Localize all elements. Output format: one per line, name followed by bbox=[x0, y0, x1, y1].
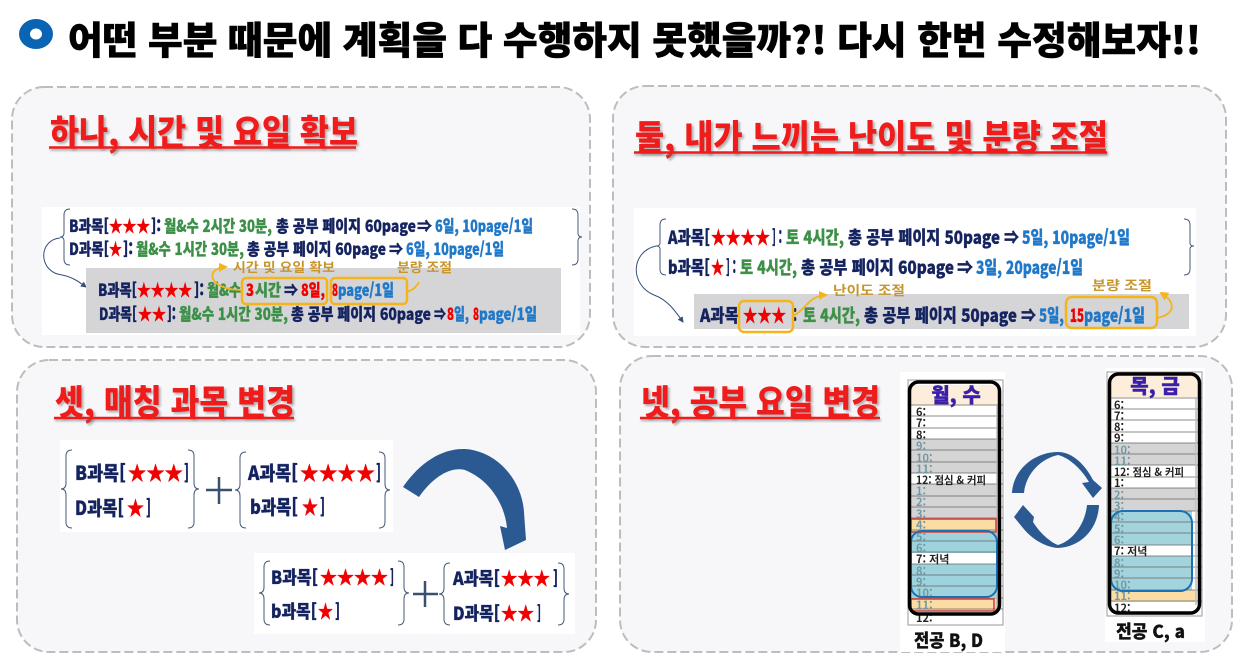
line: b subject: 총 공부 페이지 60page bbox=[801, 254, 954, 280]
line: A subject: 5일, 10page/1일 bbox=[1022, 224, 1130, 250]
line: revised B subject: 8 bbox=[332, 277, 338, 301]
hour labels: 7: bbox=[916, 415, 926, 431]
hour labels: 8: bbox=[1114, 555, 1124, 571]
line: revised A subject: 총 공부 페이지 50page bbox=[864, 302, 1017, 328]
D subject: D과목[ bbox=[453, 600, 500, 626]
line: A subject: 총 공부 페이지 50page bbox=[848, 224, 1000, 250]
line: D subject: D과목[ bbox=[69, 236, 109, 260]
hour labels: 11: bbox=[916, 461, 933, 477]
line: D subject: ]: bbox=[123, 236, 133, 260]
line: revised B subject: ★★★★ bbox=[137, 277, 192, 301]
heading: two: 둘, 내가 느끼는 난이도 및 분량 조절 bbox=[635, 110, 1108, 161]
line: revised A subject: 토 4시간, bbox=[803, 302, 860, 328]
A subject: ] bbox=[553, 565, 558, 591]
line: D subject bbox=[69, 236, 504, 260]
line: revised B subject: B과목[ bbox=[98, 277, 137, 301]
panel: time and day bbox=[12, 87, 590, 347]
line: B subject bbox=[69, 213, 533, 237]
timetable: Thu Fri bbox=[1105, 368, 1205, 644]
B subject bbox=[75, 457, 189, 486]
red highlight boxes bbox=[911, 519, 996, 611]
hour labels: 7: bbox=[1114, 408, 1124, 424]
A subject: A과목[ bbox=[247, 457, 298, 486]
B subject: ★★★★ bbox=[320, 564, 388, 590]
schedule box bbox=[634, 208, 1196, 336]
B subject: B과목[ bbox=[75, 457, 126, 486]
hour labels: 10: bbox=[1114, 577, 1131, 593]
line: revised D subject: ★★ bbox=[138, 301, 166, 325]
line: D subject: ⇒ bbox=[389, 236, 403, 260]
line: revised A subject: ⇒ bbox=[1021, 302, 1036, 328]
panel: change matching subjects bbox=[17, 360, 596, 652]
line: revised B subject: ⇒ bbox=[284, 277, 298, 301]
hour labels: 7: 저녁 bbox=[1114, 543, 1147, 559]
hour labels: 5: bbox=[916, 529, 926, 545]
hour labels: 9: bbox=[916, 574, 926, 590]
D subject: ] bbox=[146, 492, 151, 521]
hour labels: 11: bbox=[916, 597, 933, 613]
line: A subject bbox=[667, 224, 1130, 250]
schedule box bbox=[42, 207, 582, 335]
line: B subject: 월&수 2시간 30분, bbox=[164, 213, 272, 237]
matching after bbox=[254, 553, 575, 634]
line: B subject: ]: bbox=[151, 213, 161, 237]
line: D subject: 총 공부 페이지 60page bbox=[247, 236, 386, 260]
B subject bbox=[271, 564, 394, 590]
line: A subject: ⇒ bbox=[1004, 224, 1019, 250]
marker triangle bbox=[900, 482, 907, 499]
line: revised D subject bbox=[99, 301, 537, 325]
study block bbox=[1111, 511, 1192, 591]
black frame bbox=[910, 382, 1000, 614]
line: revised B subject bbox=[98, 277, 394, 301]
note: difficulty adjusted: 난이도 조절 bbox=[833, 280, 905, 299]
line: B subject: ⇒ bbox=[417, 213, 432, 237]
hour labels: 1: bbox=[1114, 475, 1124, 491]
D subject: D과목[ bbox=[75, 492, 124, 521]
hour labels: 10: bbox=[1114, 442, 1131, 458]
D subject: ★ bbox=[127, 492, 144, 521]
plus sign bbox=[206, 477, 232, 504]
hour labels: 9: bbox=[1114, 566, 1124, 582]
hour labels: 3: bbox=[916, 506, 926, 522]
A subject: ★★★★ bbox=[300, 457, 375, 486]
highlight boxes bbox=[212, 267, 419, 304]
line: b subject: ⇒ bbox=[957, 254, 973, 280]
line: revised D subject: 8 bbox=[447, 301, 454, 325]
b subject: b과목[ bbox=[271, 598, 317, 624]
line: A subject: 토 4시간, bbox=[786, 224, 844, 250]
line: revised A subject bbox=[699, 302, 1145, 328]
D subject bbox=[453, 600, 541, 626]
hour labels: 8: bbox=[916, 427, 926, 443]
header: Thu Fri: 목, 금 bbox=[1130, 370, 1180, 399]
line: revised D subject: 8 bbox=[473, 301, 479, 325]
hour labels: 11: bbox=[1114, 453, 1131, 469]
line: b subject bbox=[668, 254, 1083, 280]
hour labels: 8: bbox=[1114, 419, 1124, 435]
line: b subject: ★ bbox=[711, 254, 724, 280]
line: D subject: 월&수 1시간 30분, bbox=[136, 236, 244, 260]
line: revised A subject: ★★★ bbox=[743, 302, 786, 328]
black frame bbox=[1110, 374, 1200, 613]
hour labels: 3: bbox=[1114, 498, 1124, 514]
line: revised A subject: : bbox=[793, 302, 797, 328]
D subject: ] bbox=[537, 600, 541, 626]
line: B subject: B과목[ bbox=[69, 213, 109, 237]
line: revised D subject: page/1일 bbox=[479, 301, 537, 325]
hour labels: 11: bbox=[1114, 588, 1131, 604]
hour labels: 4: bbox=[916, 517, 926, 533]
line: revised A subject: page/1일 bbox=[1084, 302, 1145, 328]
hour labels: 6: bbox=[1114, 397, 1124, 413]
line: revised D subject: 총 공부 페이지 60page bbox=[291, 301, 431, 325]
line: revised B subject: 8일, bbox=[301, 277, 325, 301]
hour labels: 12: bbox=[916, 610, 933, 626]
hour labels: 2: bbox=[916, 494, 926, 510]
hour labels: 9: bbox=[1114, 430, 1124, 446]
hour labels: 10: bbox=[916, 585, 933, 601]
caption: 전공 C, a bbox=[1116, 618, 1185, 644]
A subject bbox=[247, 457, 381, 486]
cycle arrows bbox=[1012, 452, 1102, 548]
line: revised A subject: 15 bbox=[1070, 302, 1084, 328]
D subject: ★★ bbox=[501, 600, 534, 626]
timetable: Mon Wed bbox=[900, 372, 1005, 653]
note: amount adjusted: 분량 조절 bbox=[397, 257, 452, 276]
highlight boxes bbox=[739, 293, 1172, 332]
b subject: ★ bbox=[318, 598, 333, 624]
line: b subject: b과목[ bbox=[668, 254, 710, 280]
line: revised A subject: 5일, bbox=[1039, 302, 1064, 328]
hour labels: 4: bbox=[1114, 509, 1124, 525]
hour labels: 1: bbox=[916, 483, 926, 499]
A subject bbox=[452, 565, 558, 591]
line: b subject: 3일, 20page/1일 bbox=[976, 254, 1083, 280]
line: revised D subject: ]: bbox=[167, 301, 176, 325]
plus sign bbox=[413, 581, 438, 607]
A subject: ★★★ bbox=[501, 565, 550, 591]
heading: four: 넷, 공부 요일 변경 bbox=[641, 375, 880, 426]
B subject: ★★★ bbox=[128, 457, 183, 486]
b subject: b과목[ bbox=[250, 491, 298, 520]
note: amount adjusted: 분량 조절 bbox=[1092, 275, 1152, 294]
panel: change study days bbox=[620, 356, 1232, 653]
hour labels: 2: bbox=[1114, 487, 1124, 503]
line: revised B subject: 월&수 bbox=[207, 277, 241, 301]
matching before bbox=[60, 440, 393, 532]
hour labels: 12: bbox=[1114, 600, 1131, 616]
hour labels: 6: bbox=[916, 540, 926, 556]
line: B subject: 총 공부 페이지 60page bbox=[276, 213, 416, 237]
line: revised D subject: ⇒ bbox=[434, 301, 446, 325]
hour labels: 7: 저녁 bbox=[916, 551, 949, 567]
hour labels: 6: bbox=[1114, 532, 1124, 548]
hour labels: 6: bbox=[916, 404, 926, 420]
line: revised A subject: A과목 bbox=[699, 302, 739, 328]
note: time secured: 시간 및 요일 확보 bbox=[233, 257, 335, 276]
line: A subject: ★★★★ bbox=[711, 224, 770, 250]
panel: difficulty and amount bbox=[613, 86, 1226, 347]
line: D subject: 6일, 10page/1일 bbox=[406, 236, 504, 260]
line: revised B subject: ]: bbox=[194, 277, 204, 301]
B subject: ] bbox=[184, 457, 189, 486]
A subject: ] bbox=[376, 457, 381, 486]
hour labels: 5: bbox=[1114, 521, 1124, 537]
hour labels bbox=[916, 404, 986, 626]
line: revised B subject: 3 bbox=[246, 277, 254, 301]
arrow: swap curve bbox=[403, 449, 526, 550]
line: b subject: 토 4시간, bbox=[740, 254, 797, 280]
study block bbox=[911, 531, 997, 597]
title: 어떤 부분 때문에 계획을 다 수행하지 못했을까?! 다시 한번 수정해보자!! bbox=[68, 10, 1201, 65]
hour labels: 8: bbox=[916, 563, 926, 579]
b subject: ] bbox=[335, 598, 340, 624]
A subject: A과목[ bbox=[452, 565, 500, 591]
hour labels bbox=[1114, 397, 1184, 616]
hour labels: 12: 점심 & 커피 bbox=[1114, 464, 1184, 480]
line: revised D subject: 월&수 1시간 30분, bbox=[179, 301, 288, 325]
line: D subject: ★ bbox=[109, 236, 122, 260]
b subject: ★ bbox=[302, 491, 318, 520]
line: revised D subject: D과목[ bbox=[99, 301, 137, 325]
hour labels: 9: bbox=[916, 438, 926, 454]
line: b subject: ] : bbox=[726, 254, 736, 280]
hour labels: 12: 점심 & 커피 bbox=[916, 472, 986, 488]
line: B subject: ★★★ bbox=[109, 213, 150, 237]
line: A subject: A과목[ bbox=[667, 224, 710, 250]
line: A subject: ] : bbox=[772, 224, 782, 250]
line: B subject: 6일, 10page/1일 bbox=[435, 213, 533, 237]
B subject: B과목[ bbox=[271, 564, 318, 590]
header: Mon Wed: 월, 수 bbox=[931, 379, 981, 408]
caption: 전공 B, D bbox=[914, 627, 983, 653]
hour labels: 10: bbox=[916, 450, 933, 466]
heading: one: 하나, 시간 및 요일 확보 bbox=[50, 105, 358, 156]
title icon bbox=[19, 19, 53, 49]
line: revised B subject: page/1일 bbox=[338, 277, 394, 301]
B subject: ] bbox=[390, 564, 394, 590]
line: revised B subject: 시간 bbox=[255, 277, 281, 301]
b subject: ] bbox=[320, 491, 325, 520]
heading: three: 셋, 매칭 과목 변경 bbox=[55, 375, 295, 426]
line: revised D subject: 일, bbox=[454, 301, 469, 325]
